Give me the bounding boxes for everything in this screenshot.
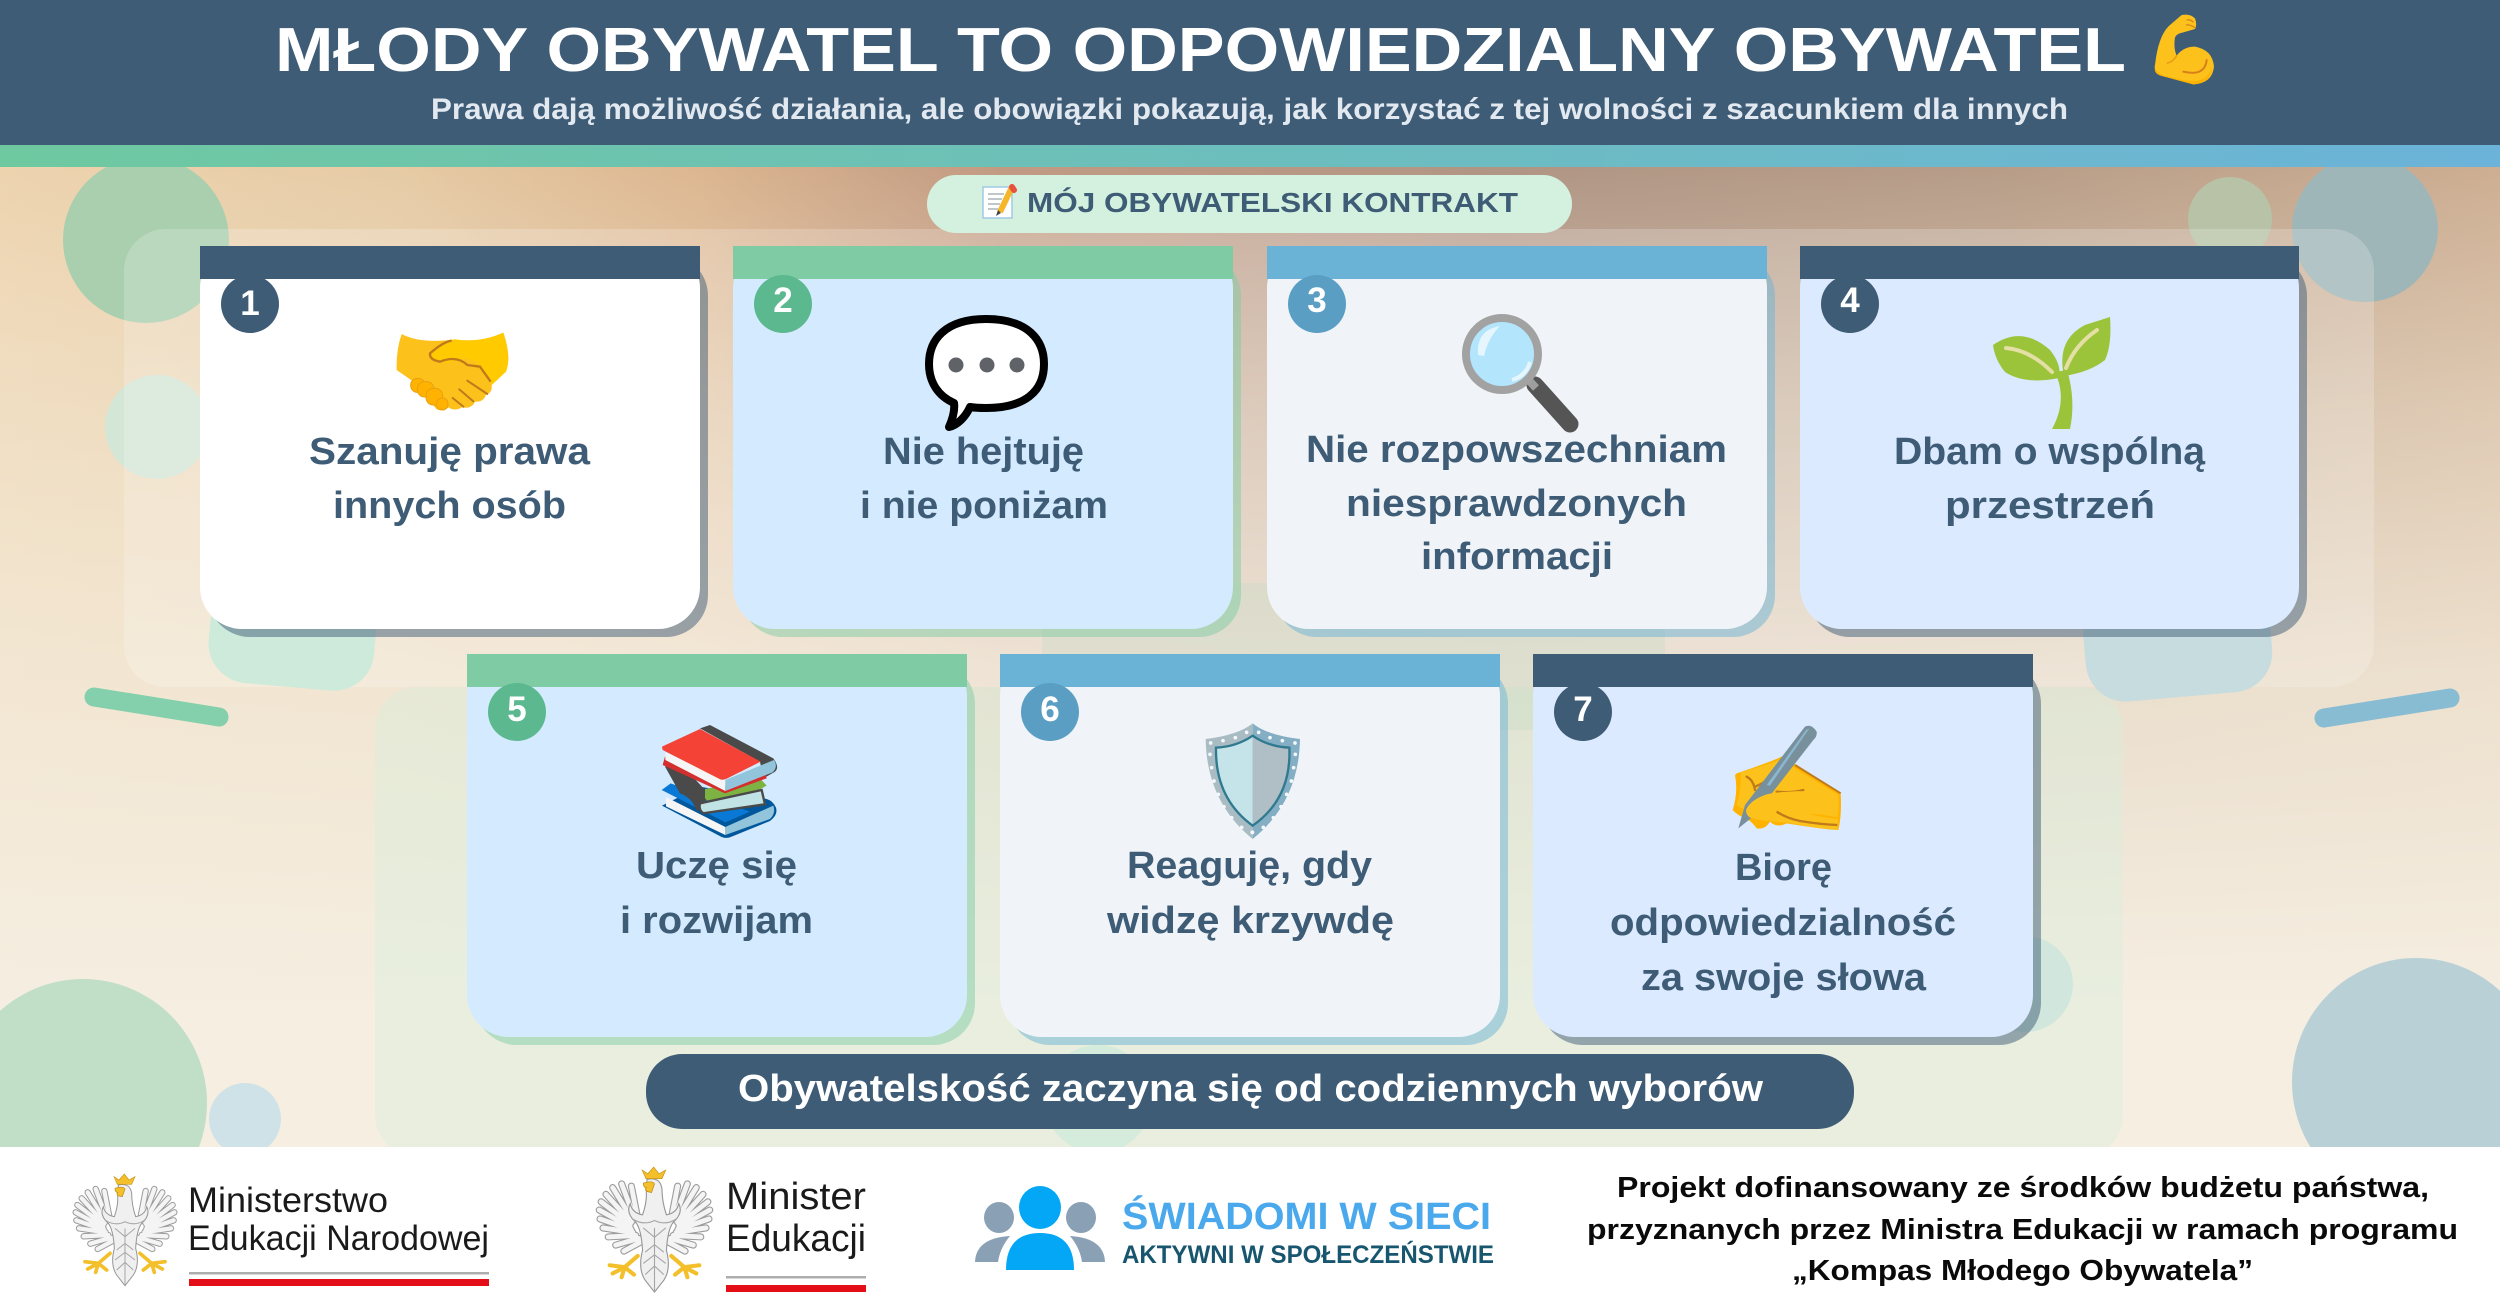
pill text: MÓJ OBYWATELSKI KONTRAKT (1027, 187, 1518, 218)
number badge 5 (488, 683, 546, 741)
number badge 2 (754, 275, 812, 333)
bottom message bar: Obywatelskość zaczyna się od codziennych wyborów (738, 1068, 1763, 1110)
funding note: Projekt dofinansowany ze środków budżetu państwa, (1617, 1172, 2429, 1204)
header (0, 0, 2500, 167)
funding note: „Kompas Młodego Obywatela” (1792, 1255, 2253, 1287)
number badge 2: 2 (773, 281, 793, 320)
logo: Świadomi w Sieci: ŚWIADOMI W SIECI (1122, 1194, 1491, 1238)
panel: card 4 (1800, 246, 2307, 637)
number badge 4: 4 (1840, 281, 1860, 320)
logo: Minister Edukacji: Minister (726, 1176, 866, 1218)
card 4 text: Dbam o wspólną (1894, 431, 2206, 473)
card 7 text: za swoje słowa (1641, 957, 1927, 999)
number badge 6 (1021, 683, 1079, 741)
number badge 1: 1 (240, 284, 260, 323)
funding note (1587, 1172, 2458, 1287)
logo: Ministerstwo Edukacji Narodowej: Edukacji Narodowej (188, 1219, 489, 1258)
card 7 text: Biorę (1735, 847, 1832, 889)
card 4 text: przestrzeń (1945, 485, 2155, 527)
card 1 text (309, 431, 591, 527)
icon: writing hand (1733, 726, 1841, 830)
card 4 text (1894, 431, 2206, 527)
number badge 5: 5 (507, 690, 527, 729)
logo: Minister Edukacji: Edukacji (726, 1218, 866, 1260)
card 5 text: Uczę się (636, 845, 797, 887)
title: MŁODY OBYWATEL TO ODPOWIEDZIALNY OBYWATEL (275, 16, 2126, 85)
logo: Minister Edukacji (599, 1167, 866, 1292)
logo: Świadomi w Sieci: AKTYWNI W SPOŁECZEŃSTWIE (1122, 1240, 1494, 1269)
card 6 text: Reaguję, gdy (1127, 845, 1372, 887)
bottom message bar (646, 1054, 1854, 1129)
icon: seedling (1993, 317, 2110, 429)
icon: flexed biceps (2155, 15, 2214, 84)
card 2 text: i nie poniżam (860, 485, 1108, 527)
funding note: przyznanych przez Ministra Edukacji w ramach programu (1587, 1214, 2458, 1246)
card 3 text: informacji (1421, 536, 1613, 578)
panel: card 5 (467, 654, 975, 1045)
panel: card 6 (1000, 654, 1508, 1045)
card 2 text (860, 431, 1108, 527)
panel: card 7 (1533, 654, 2041, 1045)
icon: speech balloon (929, 319, 1044, 427)
card 3 text: Nie rozpowszechniam (1306, 429, 1727, 471)
section label pill (927, 175, 1572, 233)
card 6 text: widzę krzywdę (1106, 900, 1394, 942)
card 7 text: odpowiedzialność (1610, 902, 1956, 944)
logo: Ministerstwo Edukacji Narodowej: Ministerstwo (188, 1181, 388, 1220)
number badge 3: 3 (1307, 281, 1327, 320)
icon: magnifying glass (1466, 318, 1570, 424)
number badge 4 (1821, 275, 1879, 333)
card 7 text (1610, 847, 1956, 999)
card 1 text: innych osób (333, 485, 566, 527)
logo: Ministerstwo Edukacji Narodowej (76, 1174, 489, 1286)
icon: handshake (397, 333, 508, 410)
card 5 text (620, 845, 813, 942)
number badge 1 (221, 275, 279, 333)
logo: Świadomi w Sieci (975, 1186, 1494, 1270)
number badge 7 (1554, 683, 1612, 741)
panel: card 3 (1267, 246, 1775, 637)
number badge 3 (1288, 275, 1346, 333)
number badge 6: 6 (1040, 690, 1060, 729)
icon: shield (1206, 723, 1300, 839)
card 5 text: i rozwijam (620, 900, 813, 942)
card 3 text: niesprawdzonych (1346, 483, 1687, 525)
card 1 text: Szanuję prawa (309, 431, 591, 473)
card 2 text: Nie hejtuję (883, 431, 1084, 473)
panel: card 1 (200, 246, 708, 637)
icon: books (662, 725, 777, 838)
card 6 text (1106, 845, 1394, 942)
panel: card 2 (733, 246, 1241, 637)
number badge 7: 7 (1573, 690, 1593, 729)
footer (0, 1147, 2500, 1313)
icon: memo (983, 187, 1014, 218)
subtitle: Prawa dają możliwość działania, ale obowiązki pokazują, jak korzystać z tej wolności z szacunkiem dla innych (431, 93, 2068, 126)
card 3 text (1306, 429, 1727, 578)
